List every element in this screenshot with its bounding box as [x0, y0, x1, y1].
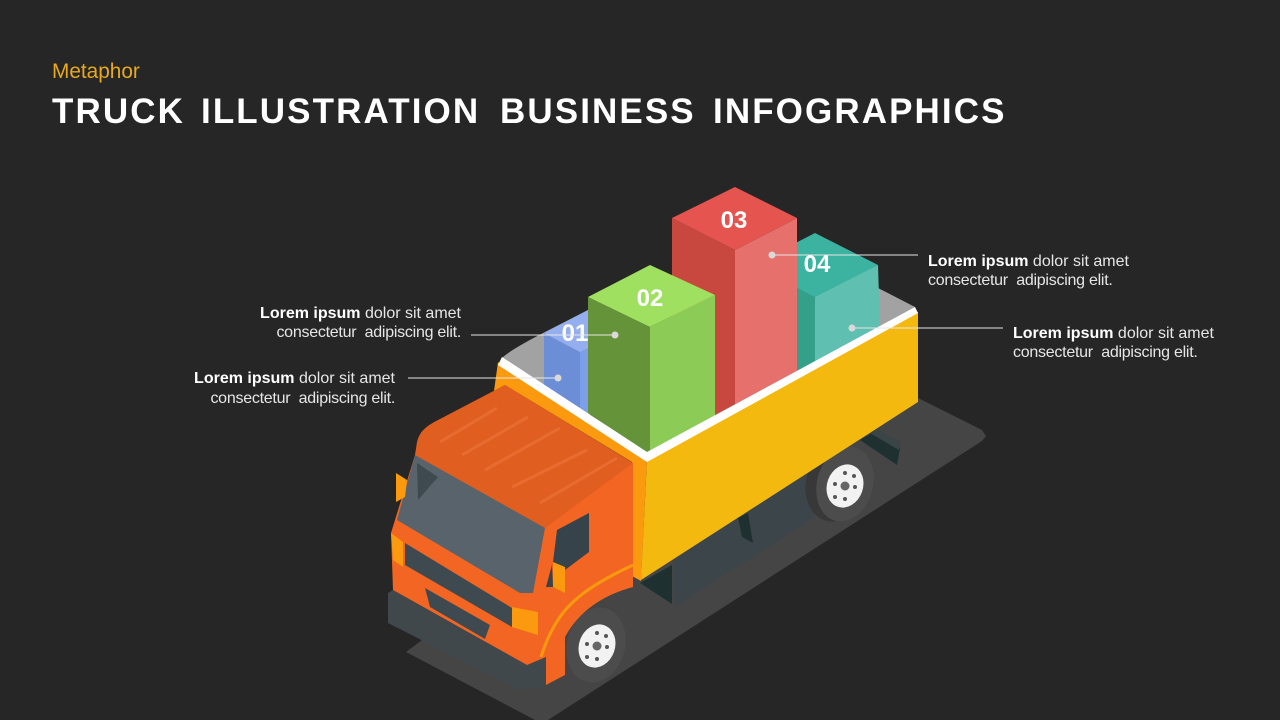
small window — [546, 565, 553, 587]
mirror left — [396, 473, 407, 502]
windshield triangle — [417, 463, 438, 500]
title: TRUCK — [52, 92, 185, 131]
box 01 — [544, 309, 590, 414]
text block 04: consectetur adipiscing elit. — [1013, 344, 1198, 361]
text block 04: Lorem ipsum dolor sit amet — [1013, 325, 1215, 342]
headlight right — [512, 607, 538, 635]
box 04 — [753, 233, 880, 372]
roof — [415, 385, 633, 528]
front wheel — [558, 601, 634, 689]
ground shadow — [406, 398, 986, 720]
roof ribs — [440, 408, 617, 503]
number 03: 03 — [721, 207, 747, 234]
front grille — [405, 543, 512, 627]
box 03 — [672, 187, 797, 417]
text block 01: Lorem ipsum dolor sit amet — [194, 370, 396, 387]
connector 02 — [471, 332, 618, 338]
text block 02 — [260, 305, 462, 341]
number 01: 01 — [562, 320, 588, 347]
text block 02: Lorem ipsum dolor sit amet — [260, 305, 462, 322]
text block 04 — [1013, 325, 1215, 361]
number 02: 02 — [637, 285, 663, 312]
side window — [553, 513, 589, 570]
title: INFOGRAPHICS — [713, 92, 1007, 131]
connector 04 — [848, 324, 1003, 332]
cargo rim white line — [498, 307, 918, 462]
lower grille — [425, 588, 490, 639]
truck illustration — [388, 187, 986, 720]
text block 01 — [194, 370, 396, 407]
title: BUSINESS — [500, 92, 696, 131]
text block 01: consectetur adipiscing elit. — [210, 390, 395, 407]
rear wheel — [797, 440, 882, 528]
mirror right — [553, 562, 565, 593]
side stripe — [541, 565, 633, 657]
text block 03 — [928, 253, 1130, 289]
headlight left — [391, 533, 403, 567]
text block 02: consectetur adipiscing elit. — [276, 324, 461, 341]
bumper — [388, 590, 546, 690]
cargo box orange front panel — [494, 362, 647, 581]
cargo bed floor — [502, 288, 915, 420]
chassis — [640, 428, 900, 607]
connector 03 — [768, 252, 918, 258]
text block 03: Lorem ipsum dolor sit amet — [928, 253, 1130, 270]
cargo box yellow side — [641, 312, 918, 580]
connector 01 — [408, 374, 562, 382]
box 02 — [588, 265, 715, 455]
windshield — [397, 455, 545, 593]
cab — [388, 385, 633, 690]
eyebrow: Metaphor: Metaphor — [52, 60, 140, 83]
text block 03: consectetur adipiscing elit. — [928, 272, 1113, 289]
cab body — [391, 385, 633, 685]
title: ILLUSTRATION — [201, 92, 480, 131]
number 04: 04 — [804, 251, 831, 278]
